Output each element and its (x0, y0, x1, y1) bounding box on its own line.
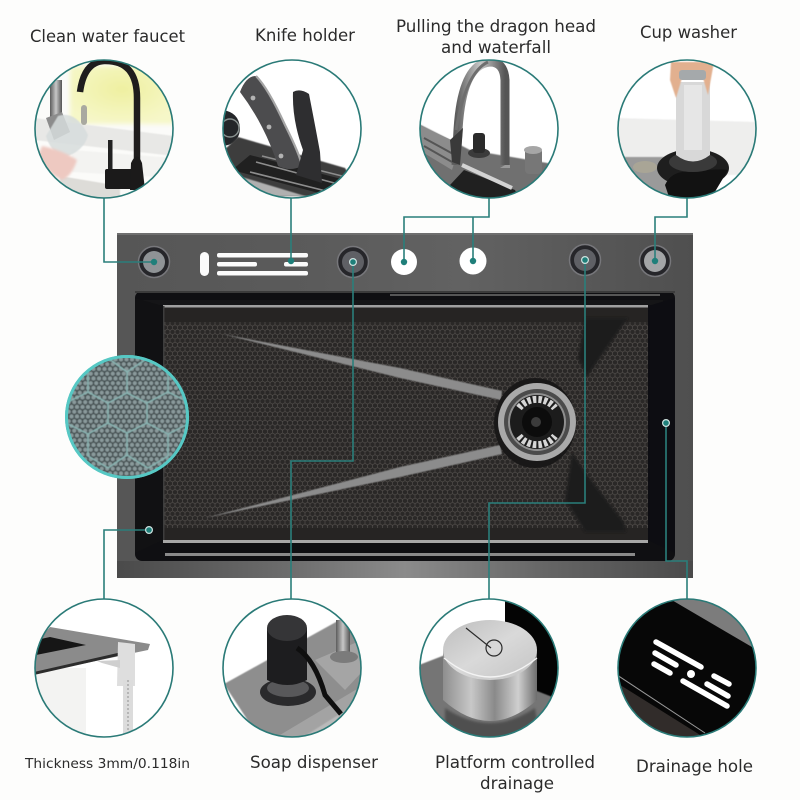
callout: pull-out faucet (419, 60, 559, 200)
basin floor with hexagon mesh (163, 306, 648, 542)
photo: pull-down faucet on deck (420, 60, 548, 198)
connector: pulling faucet and waterfall (404, 198, 489, 262)
photo: knives in holder (224, 75, 347, 197)
connector lines (104, 198, 687, 599)
label: clean water faucet: Clean water faucet (30, 27, 186, 46)
connector: thickness (104, 530, 149, 599)
photo: soap dispenser pump (226, 615, 360, 736)
connector: drainage hole (666, 423, 687, 599)
label: platform controlled drainage: Platform controlled (435, 753, 595, 772)
label: soap dispenser: Soap dispenser (250, 753, 378, 772)
tap hole: soap dispenser (338, 246, 368, 278)
sink (117, 233, 693, 578)
drain strainer (494, 378, 576, 468)
label: knife holder: Knife holder (255, 26, 355, 45)
label: thickness: Thickness 3mm/0.118in (24, 756, 190, 772)
callout: soap dispenser (222, 599, 362, 739)
callout: cup washer (617, 60, 757, 200)
floor edge highlights (163, 305, 648, 308)
sink deck plate (117, 233, 693, 578)
drain rib: lower (205, 445, 502, 518)
connector: platform drainage (489, 260, 585, 599)
tap hole: platform drain control (570, 244, 600, 276)
callout: platform controlled drainage (419, 599, 560, 740)
tap hole: pull-out faucet (391, 249, 417, 275)
label: pulling the dragon head and waterfall: Pulling the dragon head (396, 17, 596, 36)
label: cup washer: Cup washer (640, 23, 737, 42)
callout: thickness (34, 599, 174, 739)
connector end dots (146, 257, 669, 533)
connector: soap dispenser (291, 262, 353, 599)
connector: knife holder (290, 198, 292, 261)
label: pulling the dragon head and waterfall (396, 17, 596, 57)
tap hole: clean water faucet (138, 246, 170, 278)
label: platform controlled drainage (435, 753, 595, 793)
connector: clean water faucet (104, 198, 154, 262)
photo: black drain slots (617, 599, 757, 739)
callout: drainage hole (617, 599, 757, 739)
photo: black faucet and glass (34, 60, 174, 200)
tap hole: cup washer (640, 246, 670, 276)
knife holder slots (200, 252, 308, 276)
tap hole: waterfall faucet (460, 248, 486, 274)
connector: cup washer (655, 198, 687, 261)
photo: steel drain button (419, 599, 560, 740)
label: drainage hole: Drainage hole (636, 757, 753, 776)
hexagon mesh magnifier (65, 355, 189, 479)
callout: clean water faucet (34, 60, 174, 200)
photo: caliper measuring deck (36, 627, 150, 734)
callout: knife holder (221, 60, 362, 200)
basin (135, 291, 675, 561)
drain rib: upper (222, 334, 502, 400)
photo: cup washer with bottle (617, 60, 757, 200)
label: platform controlled drainage: drainage (480, 774, 554, 793)
label: pulling the dragon head and waterfall: and waterfall (441, 38, 551, 57)
